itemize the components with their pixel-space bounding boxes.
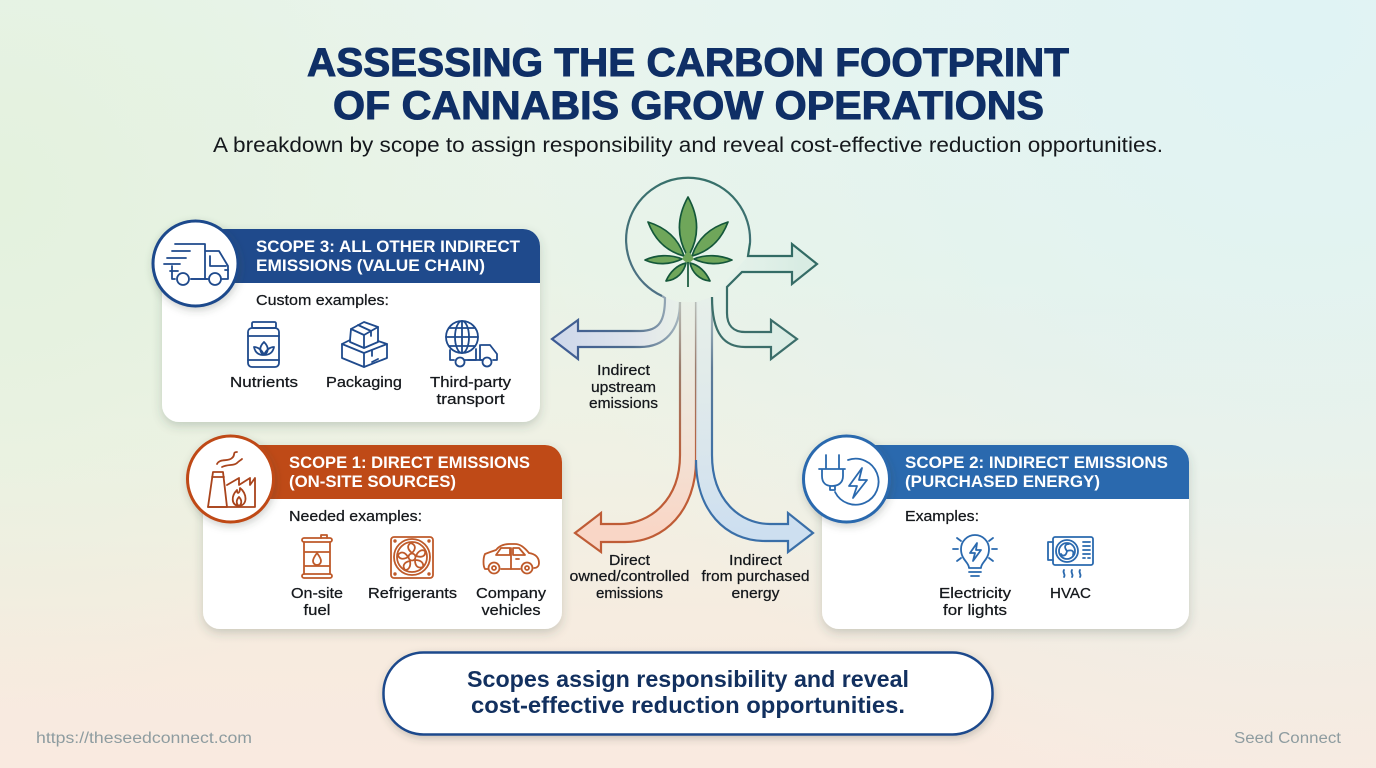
central flow diagram: [552, 178, 817, 552]
icon: delivery truck badge: [153, 221, 238, 306]
sub-heading: Needed examples:: [289, 508, 422, 525]
title: ASSESSING THE CARBON FOOTPRINT: [307, 41, 1069, 85]
label: direct owned/controlled emissions: [570, 552, 690, 602]
icon: light bulb: [953, 535, 997, 576]
heading: (ON-SITE SOURCES): [289, 473, 456, 491]
icon: HVAC unit: [1048, 537, 1093, 577]
arrow: direct owned or controlled emissions: [575, 302, 696, 552]
card background: [162, 229, 540, 422]
label: company vehicles: vehicles: [482, 602, 540, 619]
label: indirect from purchased energy: from purchased: [702, 568, 810, 585]
label: indirect upstream emissions: Indirect: [597, 362, 651, 379]
heading: [905, 454, 1168, 491]
heading: SCOPE 2: INDIRECT EMISSIONS: [905, 454, 1168, 472]
heading: [256, 238, 520, 275]
icon: cannabis leaf: [645, 197, 732, 287]
arrows: two green outputs to the right: [712, 243, 817, 359]
title: OF CANNABIS GROW OPERATIONS: [333, 84, 1044, 128]
heading: SCOPE 1: DIRECT EMISSIONS: [289, 454, 530, 472]
heading: EMISSIONS (VALUE CHAIN): [256, 257, 485, 275]
card background: [203, 445, 562, 629]
label: indirect from purchased energy: [702, 552, 810, 602]
label: third-party transport: [430, 374, 512, 408]
label: direct owned/controlled emissions: Direct: [609, 552, 651, 569]
label: indirect upstream emissions: emissions: [589, 395, 658, 412]
arrow: indirect upstream emissions: [552, 296, 680, 359]
footer brand: Seed Connect: [1234, 730, 1342, 747]
label: on-site fuel: [291, 585, 343, 619]
label: on-site fuel: On-site: [291, 585, 343, 602]
icon: nutrients jar: [248, 322, 279, 367]
heading: (PURCHASED ENERGY): [905, 473, 1100, 491]
label: direct owned/controlled emissions: emissions: [596, 585, 663, 602]
label: indirect upstream emissions: upstream: [591, 379, 656, 396]
subtitle: A breakdown by scope to assign responsibility and reveal cost-effective reduction opportunities.: [213, 134, 1163, 157]
icon: refrigerant fan: [391, 537, 433, 578]
label: indirect from purchased energy: Indirect: [729, 552, 783, 569]
card header: [846, 445, 1189, 499]
card background: [822, 445, 1189, 629]
label: electricity for lights: Electricity: [939, 585, 1012, 602]
panel: scope 2: [804, 436, 1189, 629]
label: refrigerants: Refrigerants: [368, 585, 457, 602]
icon: factory badge: [188, 436, 274, 522]
sub-heading: Custom examples:: [256, 292, 389, 309]
arrow: indirect from purchased energy: [696, 297, 813, 552]
sub-heading: Examples:: [905, 508, 979, 525]
label: packaging: Packaging: [326, 374, 402, 391]
label: HVAC: HVAC: [1050, 585, 1091, 602]
label: company vehicles: Company: [476, 585, 547, 602]
label: nutrients: Nutrients: [230, 374, 298, 391]
icon: fuel barrel: [302, 535, 332, 578]
icon: company car: [484, 544, 539, 574]
label: on-site fuel: fuel: [304, 602, 330, 619]
label: direct owned/controlled emissions: owned/controlled: [570, 568, 690, 585]
label: third-party transport: transport: [436, 391, 505, 408]
heading: [289, 454, 530, 491]
title: [307, 41, 1069, 128]
label: third-party transport: Third-party: [430, 374, 512, 391]
label: electricity for lights: [939, 585, 1012, 619]
footer url: https://theseedconnect.com: [36, 730, 252, 747]
card header: [230, 445, 562, 499]
heading: SCOPE 3: ALL OTHER INDIRECT: [256, 238, 520, 256]
icon: packaging boxes: [342, 322, 387, 367]
icon: plug and bolt badge: [804, 436, 890, 522]
callout: Scopes assign responsibility and reveal: [467, 666, 909, 692]
panel: scope 1: [188, 436, 562, 629]
callout: cost-effective reduction opportunities.: [471, 692, 905, 718]
card header: [195, 229, 540, 283]
label: indirect from purchased energy: energy: [732, 585, 780, 602]
callout: [384, 652, 992, 734]
label: indirect upstream emissions: [589, 362, 658, 412]
icon: globe and truck: [446, 321, 497, 366]
label: company vehicles: [476, 585, 547, 619]
hub circle: [626, 178, 750, 296]
panel: scope 3: [153, 221, 540, 422]
label: electricity for lights: for lights: [943, 602, 1007, 619]
